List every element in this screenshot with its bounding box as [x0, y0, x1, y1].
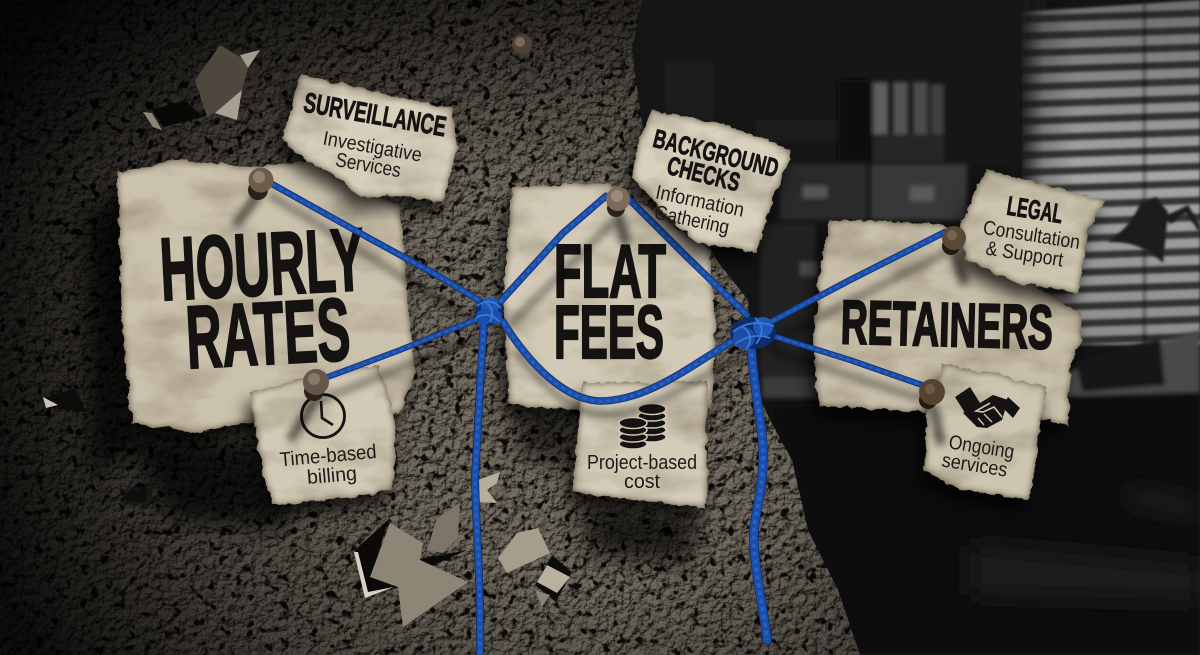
blue rope: flat fees nail to second knot, under the background checks tag	[628, 198, 747, 315]
panel: flat fees	[503, 183, 715, 410]
desk and telephone	[770, 330, 1200, 655]
heading: retainers: RETAINERS	[840, 288, 1054, 363]
rope: second knot to legal nail	[765, 232, 945, 325]
heading: hourly rates	[158, 209, 366, 387]
paper: ongoing services	[923, 363, 1047, 500]
paper: retainers	[813, 220, 1082, 425]
chair and floor, out of focus	[970, 490, 1200, 600]
paper: project-based cost	[573, 380, 707, 508]
icon: coin stacks	[619, 404, 666, 449]
text: information gathering: Gathering	[652, 202, 731, 239]
filing cabinets	[760, 164, 967, 398]
nail: time-based	[303, 369, 329, 401]
icon: handshake	[955, 387, 1020, 428]
heading: flat fees: FLAT	[554, 229, 666, 313]
tag: project-based cost	[573, 380, 707, 508]
nail: ongoing	[919, 379, 945, 409]
desk lamp silhouette	[1107, 197, 1200, 263]
rope and nail shadows	[235, 195, 965, 445]
icon: clock	[302, 394, 344, 438]
tag: time-based billing	[250, 365, 395, 505]
heading: surveillance: SURVEILLANCE	[301, 87, 449, 142]
rope: second knot to ongoing nail	[770, 335, 922, 385]
rope: second knot hanging end	[751, 345, 767, 640]
blue rope network	[235, 184, 965, 655]
text: consultation and support	[978, 217, 1082, 274]
text: project-based cost: Project-based	[587, 452, 697, 474]
heading: background checks: CHECKS	[664, 150, 743, 197]
rope: hourly rates nail to first knot	[272, 184, 485, 304]
shelf binders	[665, 62, 944, 162]
heading: hourly rates: HOURLY	[158, 209, 366, 319]
heading: flat fees	[554, 229, 666, 374]
rope: sagging line between knots	[503, 322, 738, 401]
knot: left	[475, 297, 503, 326]
wall shadows	[85, 200, 700, 565]
text: consultation and support: & Support	[984, 238, 1065, 272]
nail: legal	[942, 226, 966, 255]
concrete wall	[0, 0, 860, 655]
knot: right	[730, 317, 776, 350]
window blinds	[1022, 0, 1200, 345]
text: ongoing services: Ongoing	[947, 431, 1016, 463]
text: investigative services	[318, 128, 424, 185]
text: investigative services: Investigative	[321, 128, 424, 167]
heading: background checks	[645, 123, 782, 205]
text: time-based billing: Time-based	[279, 441, 377, 471]
debris: torn paper chips and holes	[43, 45, 572, 627]
nail: flat fees	[606, 187, 630, 217]
nail: hourly rates	[248, 168, 274, 200]
nails	[248, 168, 966, 409]
paper: legal	[960, 170, 1105, 293]
text: information gathering	[649, 181, 746, 241]
text: time-based billing	[279, 441, 379, 491]
tag: surveillance	[282, 75, 457, 202]
text: information gathering: Information	[654, 181, 746, 222]
rope: time-based nail to first knot	[325, 316, 485, 378]
paper: flat fees	[503, 183, 715, 410]
paper: background checks	[632, 110, 792, 253]
heading: legal: LEGAL	[1005, 191, 1065, 229]
text: time-based billing: billing	[306, 463, 358, 489]
heading: flat fees: FEES	[554, 290, 664, 374]
text: project-based cost: cost	[624, 471, 660, 493]
rope: first knot to flat fees nail	[500, 196, 606, 302]
text: project-based cost	[587, 452, 697, 493]
paper: surveillance	[282, 75, 457, 202]
panel: hourly rates	[118, 160, 415, 433]
panel: retainers	[813, 220, 1082, 425]
text: ongoing services: services	[940, 450, 1009, 482]
text: consultation and support: Consultation	[981, 217, 1082, 254]
rope: first knot hanging end	[475, 322, 484, 655]
text: investigative services: Services	[334, 149, 403, 182]
tag: legal	[960, 170, 1105, 293]
paper: hourly rates	[118, 160, 415, 433]
text: ongoing services	[940, 431, 1016, 482]
heading: hourly rates: RATES	[183, 279, 353, 387]
tag: ongoing services	[923, 363, 1047, 500]
heading: background checks: BACKGROUND	[650, 123, 782, 183]
tag: background checks	[632, 110, 792, 253]
paper: time-based billing	[250, 365, 395, 505]
lone nail at top of wall	[512, 34, 532, 54]
